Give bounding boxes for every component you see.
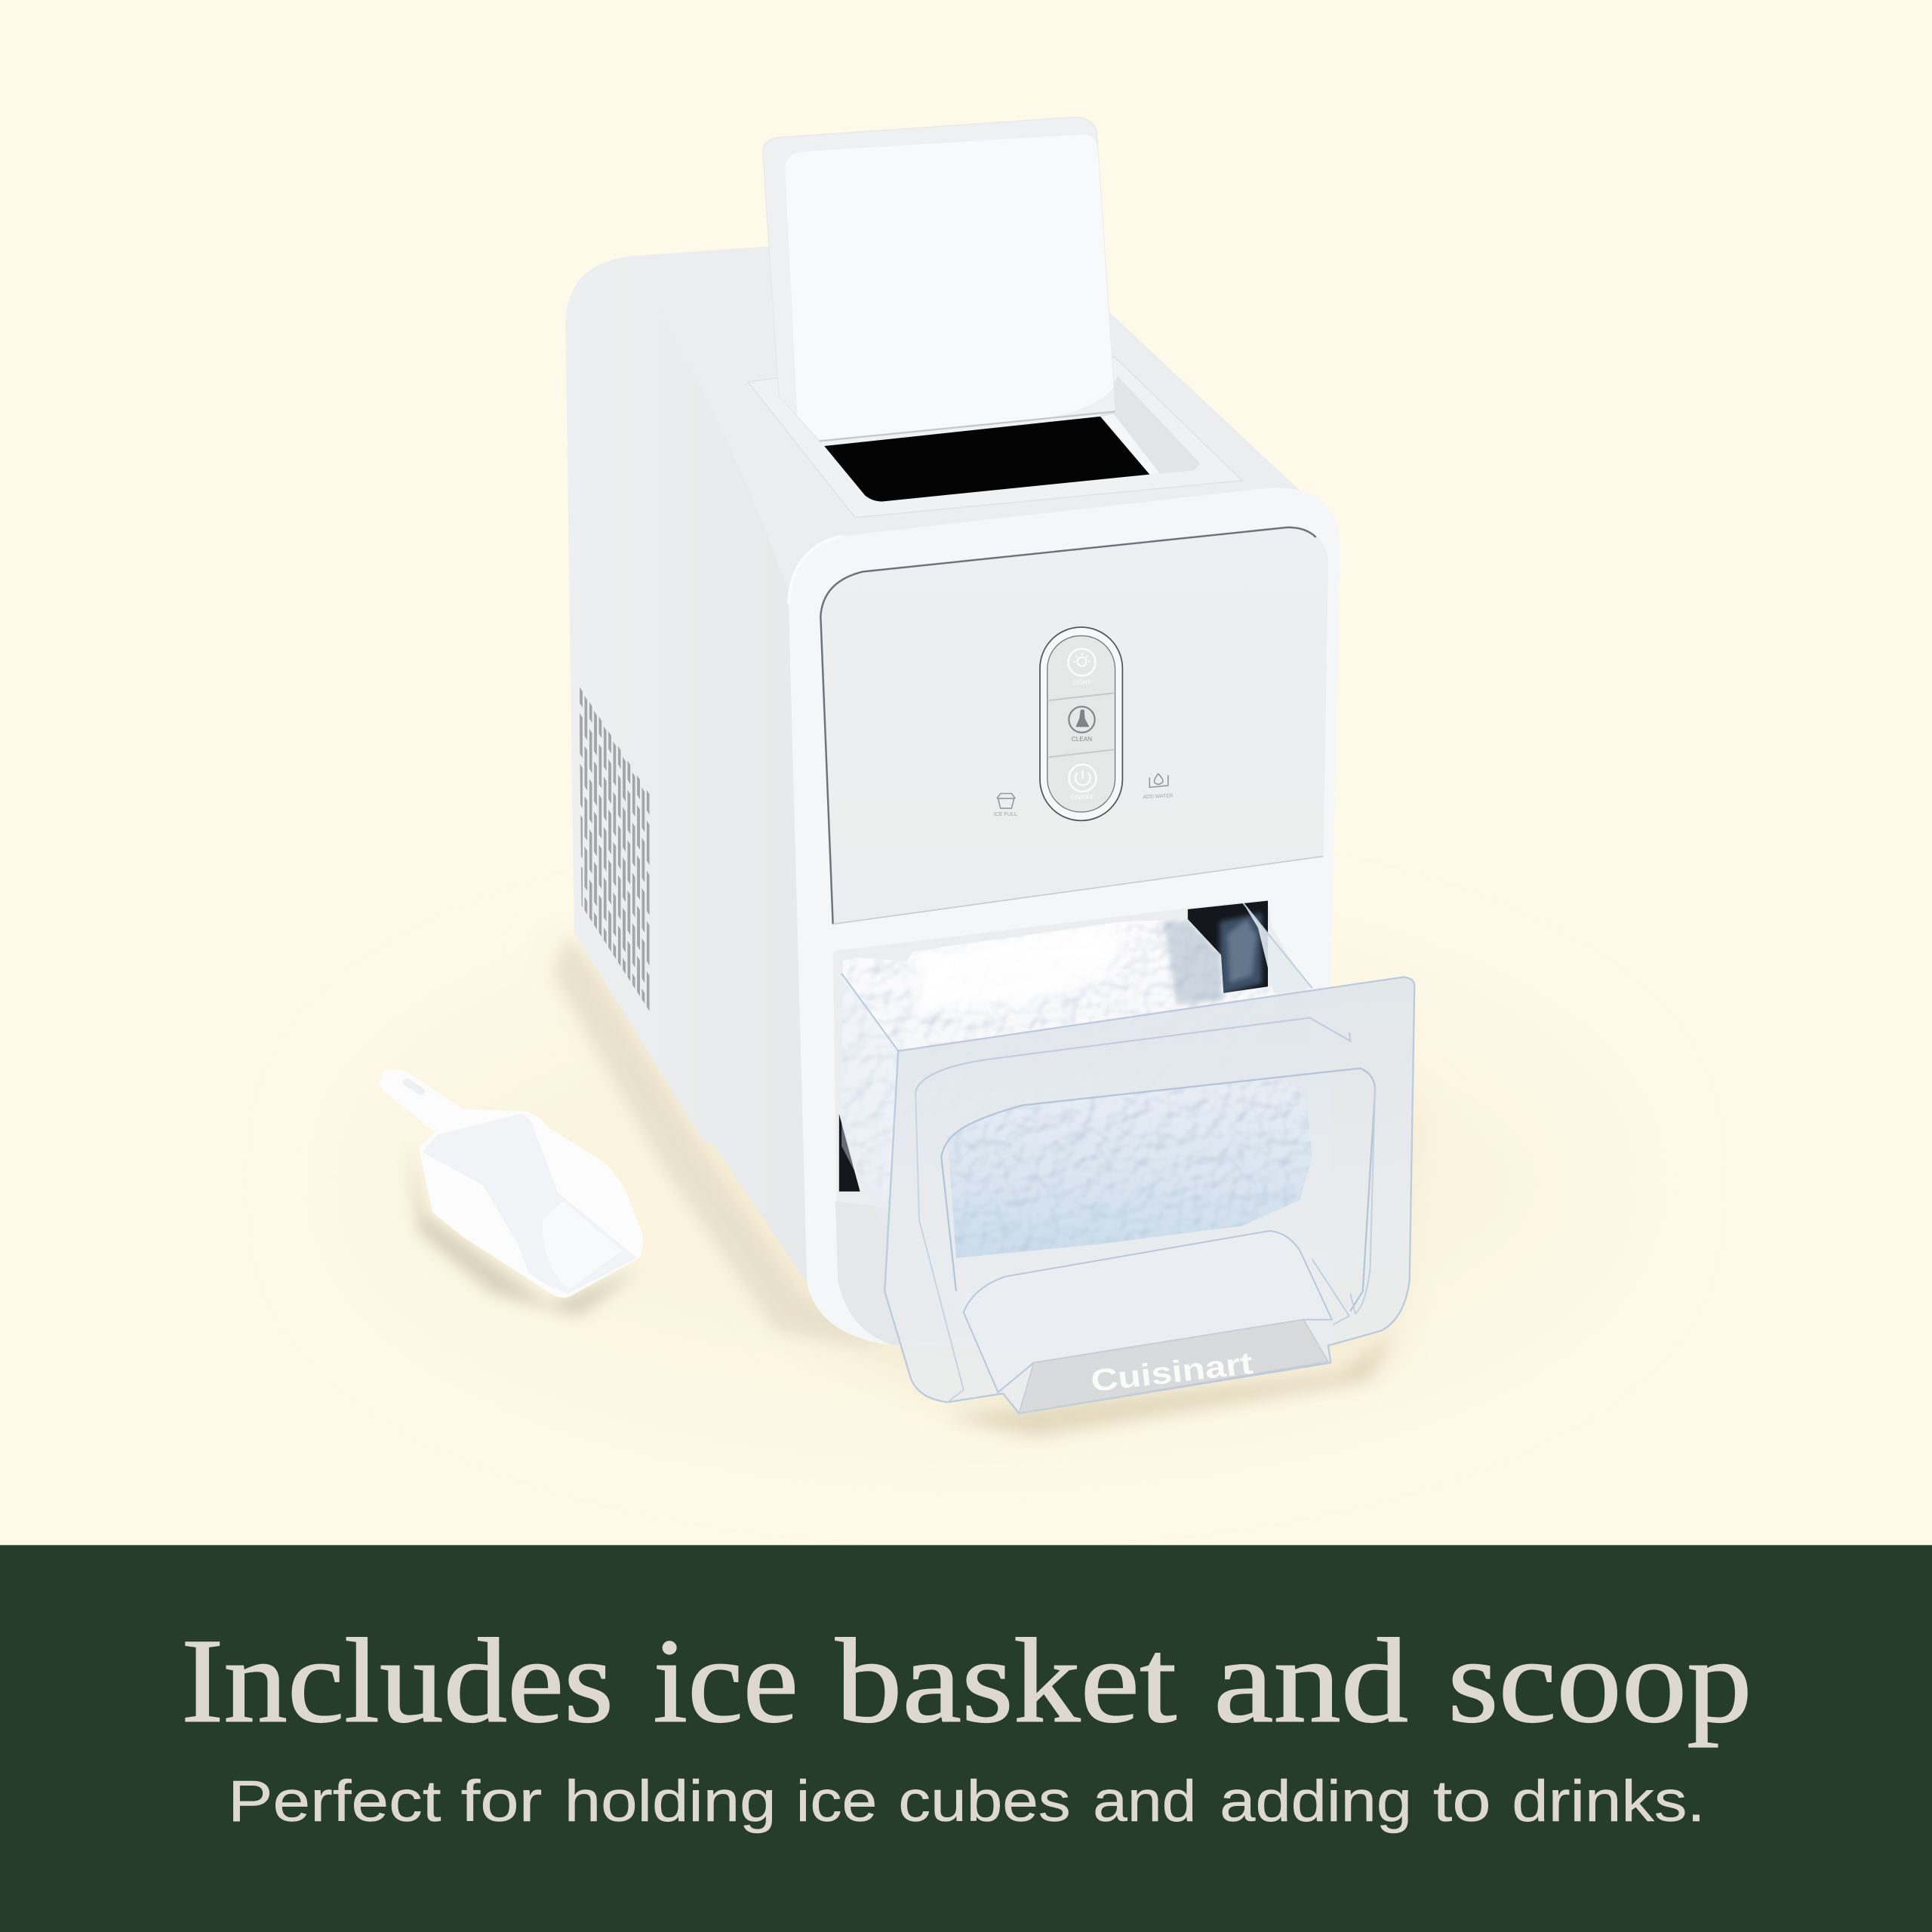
machine side panel — [565, 247, 863, 1284]
left glass wall — [841, 974, 898, 1232]
panel lower lip — [833, 857, 1323, 924]
subheading: for — [461, 1770, 542, 1834]
button: on/off — [1069, 764, 1096, 801]
control panel face — [820, 528, 1328, 924]
button: light: LIGHT — [1072, 679, 1091, 686]
side vent grille — [580, 687, 650, 1011]
top recess ledge — [1100, 376, 1200, 475]
machine top surface — [629, 247, 1303, 592]
lower bay recess — [835, 1201, 974, 1346]
scoop — [379, 1069, 643, 1298]
add water indicator — [1143, 774, 1174, 800]
flip lid — [763, 117, 1115, 441]
heading: basket — [835, 1614, 1177, 1748]
subheading: ice — [796, 1770, 877, 1834]
button: clean: CLEAN — [1072, 736, 1092, 743]
subheading: and — [1093, 1770, 1196, 1834]
handle grip — [1019, 1320, 1328, 1414]
heading: scoop — [1447, 1614, 1752, 1748]
scoop handle slot — [401, 1077, 426, 1097]
heading: Includes — [181, 1614, 614, 1748]
water tank opening — [824, 417, 1149, 501]
scoop outer body — [379, 1069, 643, 1298]
scoop inner bowl — [423, 1114, 637, 1294]
basket inner rim — [915, 1018, 1350, 1092]
subheading: holding — [565, 1770, 777, 1834]
button: clean — [1069, 706, 1095, 743]
ice basket — [841, 903, 1414, 1414]
subheading: cubes — [898, 1770, 1071, 1834]
heading: and — [1214, 1614, 1408, 1748]
brand logo: Cuisinart — [1089, 1346, 1255, 1398]
ice full indicator: ICE FULL — [993, 811, 1017, 817]
subheading: Perfect — [228, 1770, 441, 1834]
basket front body — [884, 977, 1414, 1414]
button: on/off: ON/OFF — [1071, 794, 1094, 801]
ice in basket — [948, 1081, 1312, 1258]
top bezel — [748, 357, 1242, 518]
basket left channel — [915, 1092, 964, 1402]
caption band — [0, 1545, 1932, 1932]
add water indicator: ADD WATER — [1143, 793, 1174, 800]
dark interior — [1163, 900, 1268, 1001]
subheading: to — [1433, 1770, 1491, 1834]
floor shadow — [370, 888, 1601, 1435]
control pill — [1040, 627, 1122, 820]
ice in bin (rear) — [842, 919, 1277, 1204]
subheading: drinks. — [1512, 1770, 1706, 1834]
ice bay surround — [833, 900, 1309, 1281]
ice full indicator — [993, 793, 1017, 817]
basket inner window — [941, 1069, 1375, 1311]
button: light — [1069, 649, 1095, 686]
rear glass wall — [1243, 903, 1312, 993]
handle top — [964, 1231, 1332, 1392]
subheading: adding — [1220, 1770, 1412, 1834]
ice maker machine — [565, 117, 1340, 1346]
basket right channel — [1312, 1085, 1375, 1324]
front frame — [789, 488, 1340, 1346]
heading: ice — [653, 1614, 798, 1748]
